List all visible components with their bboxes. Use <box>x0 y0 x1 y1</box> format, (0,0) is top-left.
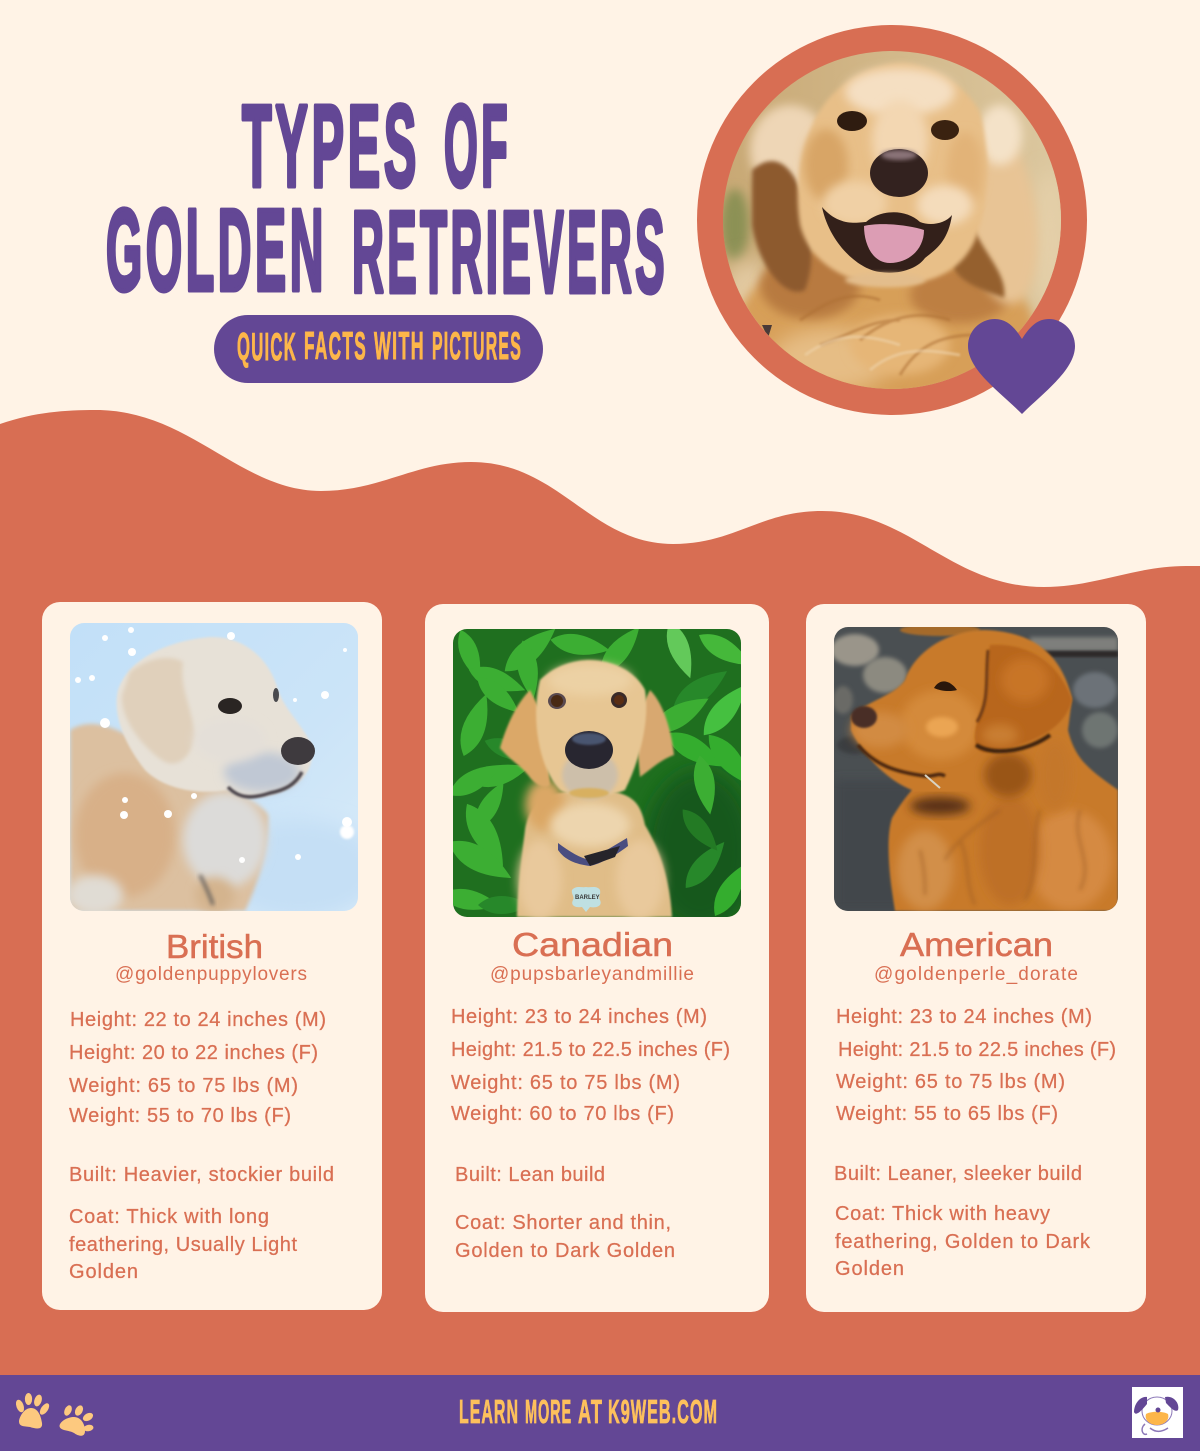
footer link text <box>459 1393 718 1430</box>
nose <box>870 149 928 197</box>
icon: paw prints <box>14 1393 95 1436</box>
collar and tag <box>558 838 628 866</box>
footer link text: LEARN <box>459 1393 519 1430</box>
name: British: British <box>166 928 263 965</box>
credit: @goldenpuppylovers <box>115 964 307 985</box>
facts: American: Built: Leaner, sleeker build <box>834 1163 1082 1185</box>
title: OF <box>444 81 511 211</box>
facts: British: Weight: 55 to 70 lbs (F) <box>69 1105 291 1127</box>
logo: K9 dog <box>1132 1387 1183 1438</box>
facts: Canadian: Coat: Shorter and thin, <box>455 1212 671 1234</box>
facts: American <box>834 1006 1116 1280</box>
facts: Canadian <box>451 1006 730 1262</box>
eyes <box>837 111 867 131</box>
facts: American: Height: 23 to 24 inches (M) <box>836 1006 1092 1028</box>
ear and head <box>117 637 312 798</box>
facts: Canadian: Built: Lean build <box>455 1164 605 1186</box>
facts: British: feathering, Usually Light <box>69 1234 297 1256</box>
head <box>536 660 646 796</box>
body <box>70 724 268 911</box>
photo: Canadian golden among leaves: BARLEY <box>575 895 600 901</box>
facts: American: Weight: 65 to 75 lbs (M) <box>836 1071 1065 1093</box>
coral wave section <box>0 410 1200 1380</box>
facts: American: feathering, Golden to Dark <box>835 1231 1091 1253</box>
ears <box>500 690 550 787</box>
title <box>106 81 668 317</box>
footer link text: MORE <box>525 1393 572 1430</box>
facts: Canadian: Height: 21.5 to 22.5 inches (F) <box>451 1039 730 1061</box>
dog <box>851 630 1118 911</box>
mouth <box>822 207 952 273</box>
facts: American: Golden <box>835 1258 904 1280</box>
panel: Canadian <box>425 604 769 1312</box>
subtitle pill: WITH <box>374 325 425 368</box>
photo: British golden in snow <box>70 623 358 911</box>
fur strokes <box>800 296 975 375</box>
head <box>798 63 987 285</box>
facts: British <box>69 1009 334 1283</box>
facts: Canadian: Golden to Dark Golden <box>455 1240 675 1262</box>
panel: British <box>42 602 382 1310</box>
footer bar <box>0 1375 1200 1451</box>
facts: British: Height: 22 to 24 inches (M) <box>70 1009 326 1031</box>
text: RETRIEVERS <box>352 187 668 317</box>
footer link text: AT <box>578 1393 603 1430</box>
subtitle pill: QUICK <box>237 326 297 369</box>
subtitle pill <box>214 315 543 383</box>
credit: @pupsbarleyandmillie <box>490 964 694 985</box>
fur strokes <box>920 810 1085 905</box>
name: Canadian: Canadian <box>512 926 673 963</box>
subtitle pill: FACTS <box>304 325 367 368</box>
ears <box>745 100 818 186</box>
eye, nose, mouth <box>934 681 957 691</box>
ear <box>975 645 1072 752</box>
name: American: American <box>900 926 1053 963</box>
photo: Canadian golden among leaves <box>453 629 741 917</box>
hero photo: golden retriever in coral ring <box>697 25 1087 430</box>
facts: British: Height: 20 to 22 inches (F) <box>69 1042 318 1064</box>
facts: British: Built: Heavier, stockier build <box>69 1164 334 1186</box>
footer bar: K9WEB.COM <box>608 1393 718 1430</box>
facts: American: Weight: 55 to 65 lbs (F) <box>836 1103 1058 1125</box>
panel: American <box>806 604 1146 1312</box>
snowflakes <box>75 627 354 863</box>
facts: Canadian: Height: 23 to 24 inches (M) <box>451 1006 707 1028</box>
credit: @goldenperle_dorate <box>874 964 1078 985</box>
facts: British: Weight: 65 to 75 lbs (M) <box>69 1075 298 1097</box>
title: TYPES <box>242 81 420 211</box>
facts: British: Coat: Thick with long <box>69 1206 269 1228</box>
facts: American: Coat: Thick with heavy <box>835 1203 1050 1225</box>
body fur <box>742 268 1035 389</box>
facts: American: Height: 21.5 to 22.5 inches (F) <box>838 1039 1116 1061</box>
icon: heart <box>968 319 1075 414</box>
facts: Canadian: Weight: 60 to 70 lbs (F) <box>451 1103 674 1125</box>
title: GOLDEN <box>106 185 327 315</box>
photo: American golden by stone wall <box>831 624 1118 911</box>
dog body <box>517 790 672 917</box>
facts: British: Golden <box>69 1261 138 1283</box>
subtitle pill: PICTURES <box>432 325 522 368</box>
facts: Canadian: Weight: 65 to 75 lbs (M) <box>451 1072 680 1094</box>
